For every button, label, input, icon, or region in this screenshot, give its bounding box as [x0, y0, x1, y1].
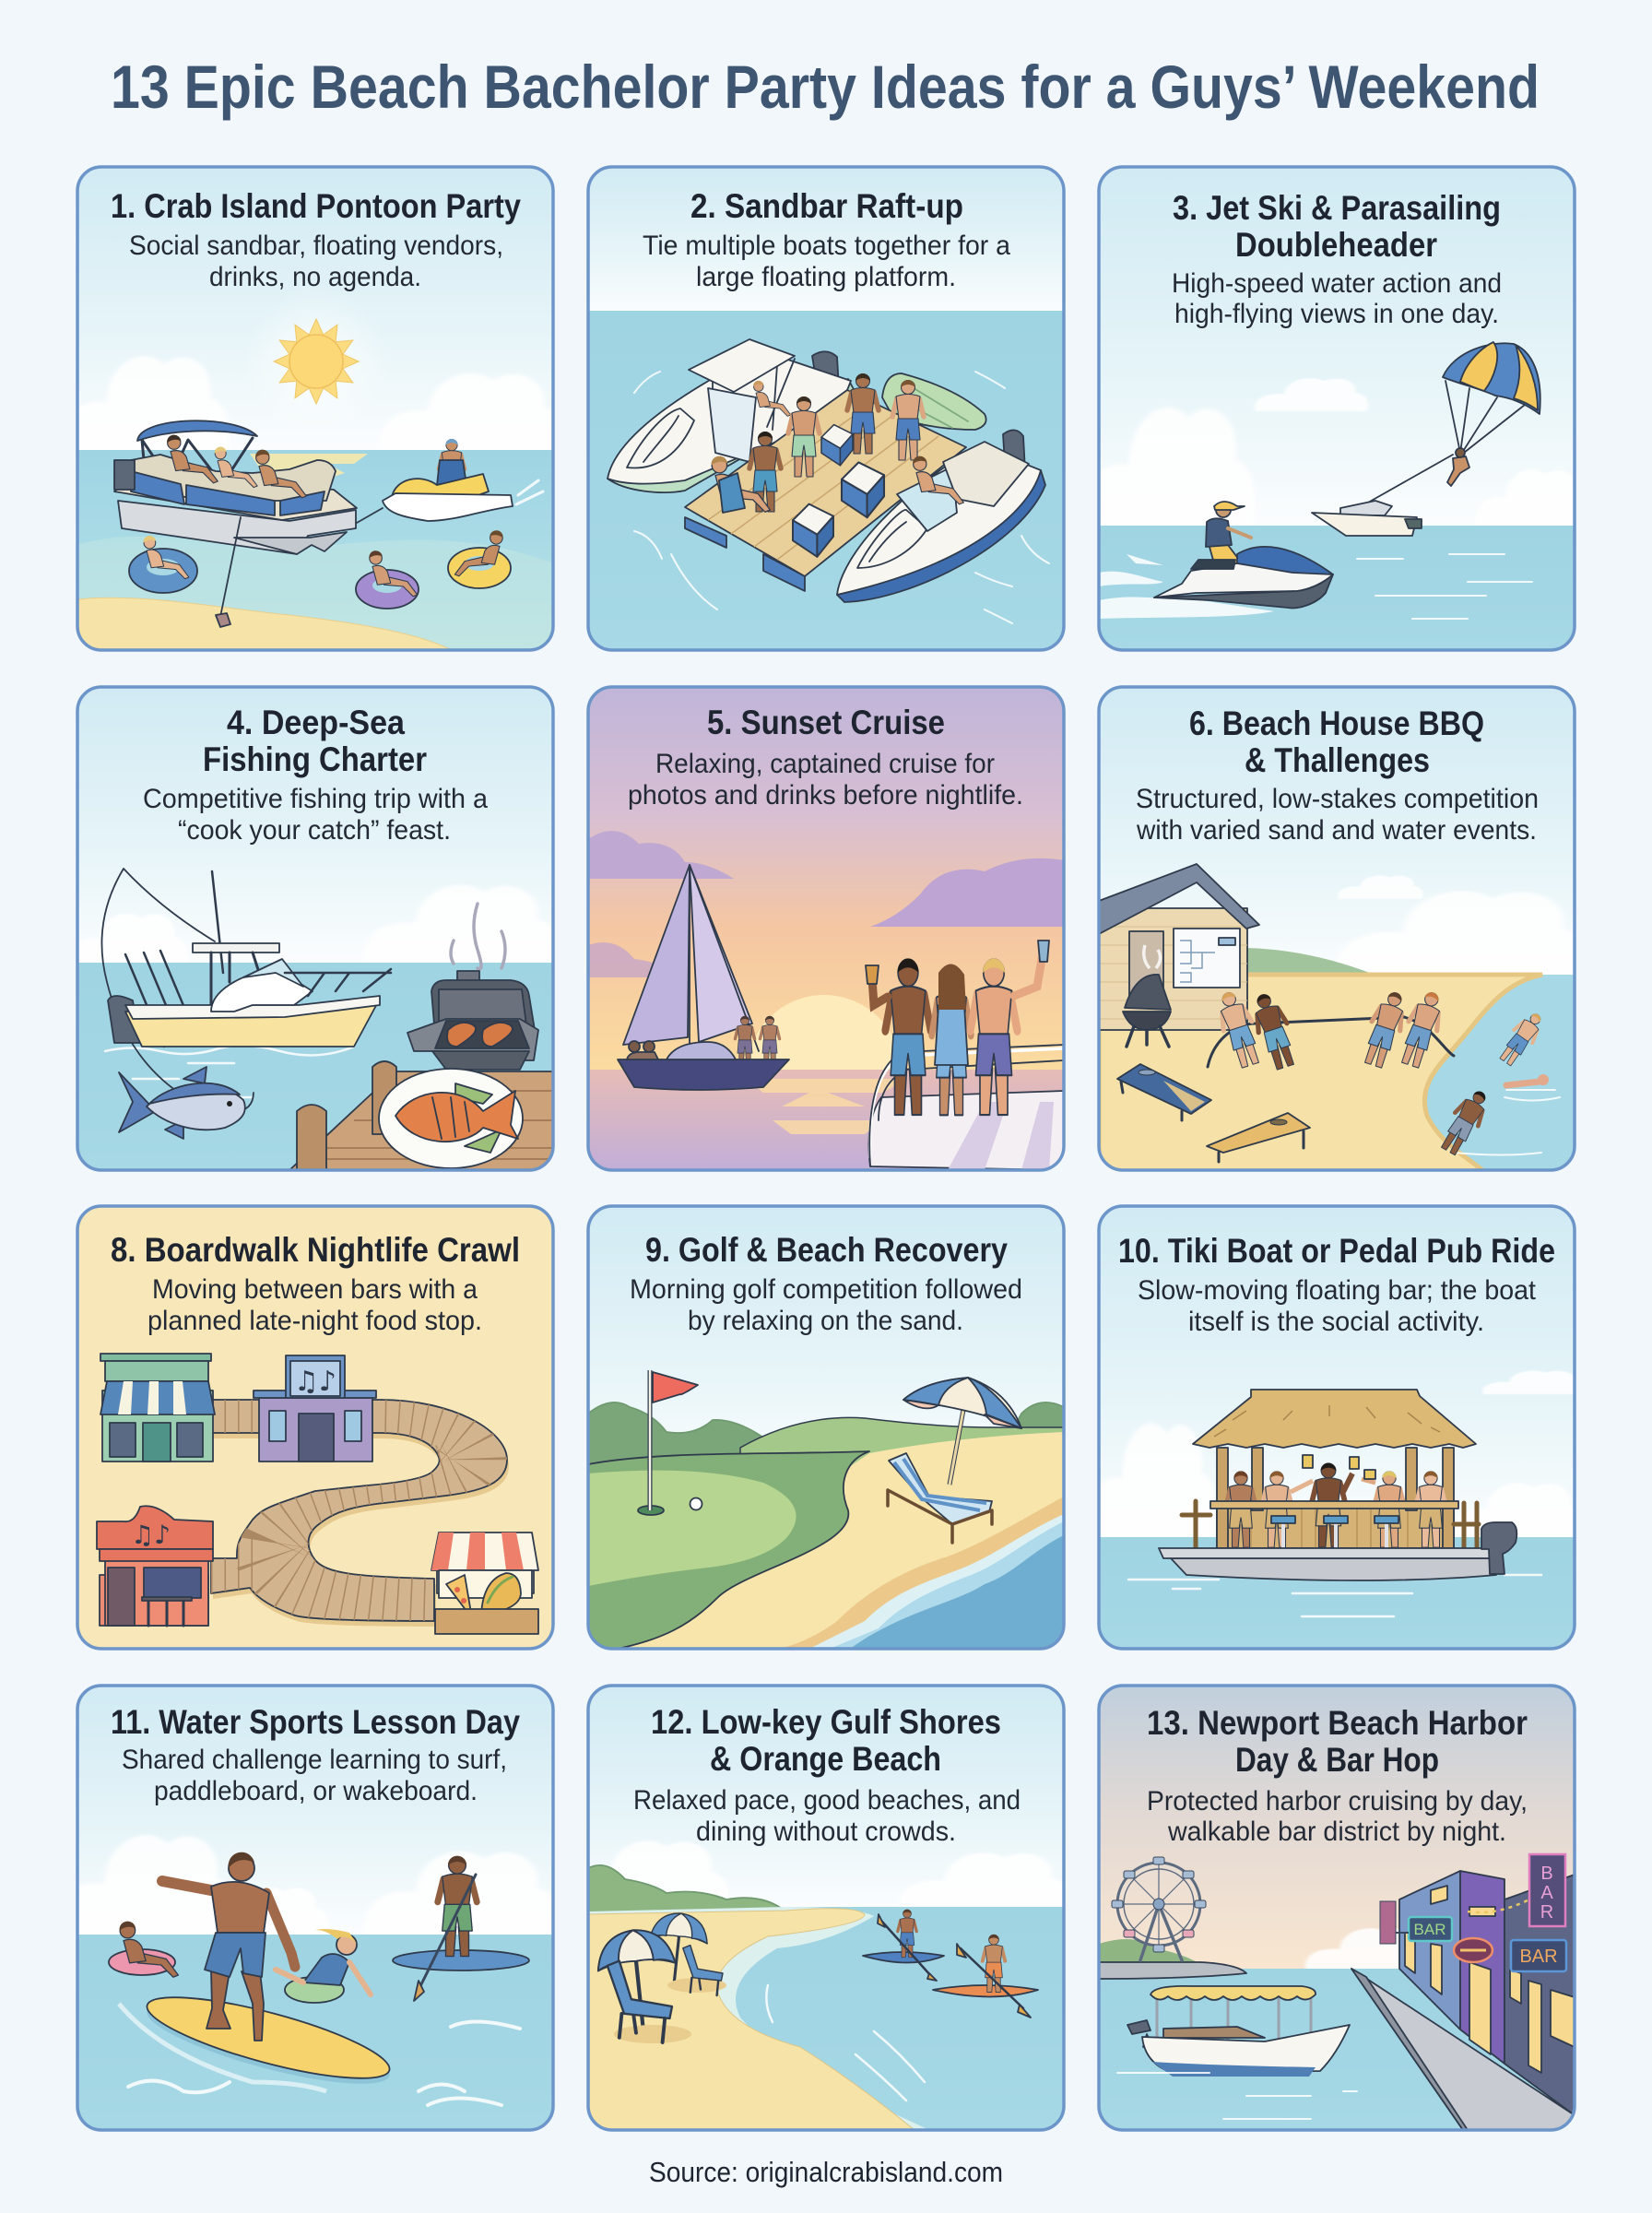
icon: surfer instructor [162, 1852, 295, 2041]
icon: pontoon hull [1159, 1548, 1496, 1580]
tow line [1368, 455, 1453, 503]
icon: tiki bar with thatched roof [1182, 1448, 1479, 1549]
description: Morning golf competition followed [630, 1274, 1022, 1305]
illustration: jet ski and parasail [1085, 167, 1589, 651]
description: Moving between bars with a [152, 1274, 478, 1305]
icon: orange kayak [933, 1935, 1038, 2018]
fairway [740, 1417, 1064, 1483]
icon: duffy boat [1127, 1986, 1350, 2077]
description: itself is the social activity. [1188, 1307, 1484, 1337]
icon: ferris wheel [1112, 1857, 1206, 1960]
description: Competitive fishing trip with a [143, 784, 488, 814]
icon: left white boat [608, 339, 856, 492]
icon: neon signs: R [1540, 1902, 1553, 1923]
description: planned late-night food stop. [148, 1306, 482, 1336]
sand [77, 598, 454, 651]
icon: blue cornhole board [1117, 1064, 1211, 1120]
heading [203, 704, 427, 778]
icon: dock [289, 1061, 553, 1171]
heading [1189, 704, 1484, 779]
illustration: golf green and beach [588, 1206, 1064, 1649]
icon: red bar with stools: ♫♪ [131, 1520, 171, 1550]
description [143, 784, 488, 846]
description: Shared challenge learning to surf, [122, 1745, 507, 1775]
icon: golf flag [638, 1370, 698, 1515]
panel: 12. Low-key Gulf Shores & Orange Beach [569, 1686, 1070, 2130]
icon: golf ball [690, 1497, 702, 1510]
icon: headland [1099, 1939, 1200, 1964]
icon: coolers [793, 425, 884, 557]
icon: kettle grill [1123, 945, 1171, 1047]
description: dining without crowds. [696, 1817, 956, 1847]
description [1138, 1275, 1537, 1337]
sand [1099, 975, 1542, 1171]
illustration: raft-up of boats [588, 167, 1064, 650]
icon: surfboard [119, 1982, 395, 2100]
panel: 13. Newport Beach Harbor Day & Bar Hop [1099, 1686, 1575, 2130]
panel: 8. Boardwalk Nightlife Crawl [77, 1206, 553, 1649]
description [633, 1785, 1021, 1847]
icon: yellow tube person [448, 530, 511, 588]
icon: tan cornhole board [1207, 1113, 1310, 1162]
water [773, 1497, 1064, 1649]
heading: 1. Crab Island Pontoon Party [111, 187, 521, 225]
description [129, 231, 503, 292]
icon: paddleboarder [393, 1856, 529, 2001]
tug of war rope [1208, 1017, 1454, 1067]
heading: 4. Deep-Sea [227, 704, 405, 741]
icon: yacht bow [868, 1045, 1064, 1170]
icon: sun [274, 319, 359, 404]
illustration: fishing boat, grill and dock [69, 687, 560, 1171]
icon: fishing boat [101, 869, 391, 1111]
icon: pink tube person [109, 1922, 178, 1977]
description: high-flying views in one day. [1174, 299, 1499, 329]
panel: 1. Crab Island Pontoon Party [64, 167, 565, 651]
panel: 6. Beach House BBQ & Thallenges [1099, 687, 1592, 1171]
people on yacht [866, 941, 1049, 1115]
heading: & Orange Beach [710, 1740, 941, 1778]
treeline [588, 1402, 777, 1483]
icon: food stand [431, 1533, 538, 1634]
description [1172, 268, 1502, 329]
green headland [588, 1865, 785, 1927]
illustration: pontoon party at sandbar [64, 167, 565, 651]
description: Protected harbor cruising by day, [1147, 1786, 1528, 1817]
icon: parasail [1443, 342, 1540, 486]
bar counter [1210, 1501, 1458, 1509]
description: Relaxed pace, good beaches, and [633, 1785, 1021, 1816]
description: paddleboard, or wakeboard. [154, 1776, 478, 1806]
icon: green bar [100, 1354, 215, 1462]
icon: neon signs: BAR [1414, 1921, 1446, 1938]
icon: tow boat [1312, 501, 1422, 536]
description: Tie multiple boats together for a [643, 231, 1010, 261]
icon: green inflatable float [882, 373, 986, 430]
description: large floating platform. [696, 262, 956, 292]
thatched roof [1193, 1390, 1476, 1448]
illustration: tiki boat bar [1089, 1206, 1587, 1649]
people on deck [712, 373, 924, 513]
panel: 11. Water Sports Lesson Day [58, 1686, 560, 2130]
icon: purple tube person [356, 550, 419, 609]
icon: spray [1099, 554, 1274, 619]
heading: 8. Boardwalk Nightlife Crawl [111, 1231, 520, 1269]
panel: 4. Deep-Sea Fishing Charter [69, 687, 560, 1171]
icon: beach house [1099, 864, 1259, 1030]
heading [1173, 189, 1501, 264]
sand beach [588, 1907, 929, 2130]
heading [651, 1703, 1001, 1778]
description [643, 231, 1010, 292]
icon: bar stools [1271, 1516, 1398, 1548]
heading: 2. Sandbar Raft-up [690, 187, 963, 225]
description: walkable bar district by night. [1167, 1817, 1506, 1847]
description: High-speed water action and [1172, 268, 1502, 299]
icon: purple bar with music sign: ♫♪ [294, 1366, 336, 1398]
description [1136, 784, 1539, 846]
description: Social sandbar, floating vendors, [129, 231, 503, 261]
icon: neon signs [1380, 1854, 1566, 1971]
icon: right blue boat [837, 430, 1045, 602]
icon: neon signs: BAR [1519, 1947, 1558, 1967]
description [628, 749, 1023, 811]
heading: 6. Beach House BBQ [1189, 704, 1484, 742]
icon: green tube swimmer [276, 1929, 371, 2003]
boardwalk path [211, 1400, 509, 1627]
icon: harbor walkway [1351, 1969, 1575, 2130]
icon: lounge chair [888, 1453, 992, 1543]
heading: & Thallenges [1245, 741, 1430, 779]
heading: 10. Tiki Boat or Pedal Pub Ride [1118, 1232, 1555, 1270]
icon: grill [407, 971, 538, 1070]
icon: beach umbrellas [595, 1911, 710, 2034]
heading [1147, 1704, 1528, 1779]
description [148, 1274, 482, 1336]
heading: Day & Bar Hop [1235, 1741, 1439, 1779]
heading: 5. Sunset Cruise [707, 704, 945, 741]
heading: 11. Water Sports Lesson Day [111, 1703, 520, 1741]
icon: pontoon boat [114, 420, 383, 554]
heading: Doubleheader [1235, 226, 1437, 264]
illustration: quiet beach and kayaks [569, 1686, 1070, 2130]
panel: 3. Jet Ski & Parasailing Doubleheader [1085, 167, 1589, 651]
icon: jet ski with rider [1154, 502, 1333, 608]
smoke [451, 904, 505, 969]
description: Slow-moving floating bar; the boat [1138, 1275, 1537, 1306]
description: by relaxing on the sand. [688, 1306, 963, 1336]
source footer: Source: originalcrabisland.com [649, 2156, 1003, 2188]
panel: 10. Tiki Boat or Pedal Pub Ride [1089, 1206, 1587, 1649]
description: with varied sand and water events. [1136, 815, 1537, 846]
description: drinks, no agenda. [209, 262, 421, 292]
illustration: harbor cruise and bar district [1099, 1686, 1575, 2130]
icon: beach chairs [608, 1946, 726, 2043]
illustration: sailboat and yacht at sunset [588, 687, 1064, 1171]
icon: outboard motor [1481, 1522, 1516, 1574]
description: Structured, low-stakes competition [1136, 784, 1539, 814]
icon: neon signs: A [1540, 1883, 1553, 1903]
icon: beach umbrella [903, 1378, 1021, 1485]
panel: 9. Golf & Beach Recovery [588, 1206, 1064, 1649]
icon: tuna fish [119, 1067, 245, 1139]
description: “cook your catch” feast. [178, 815, 451, 846]
illustration: beach house, tug of war and cornhole [1099, 687, 1592, 1171]
icon: blue kayak [863, 1910, 944, 1981]
description: photos and drinks before nightlife. [628, 780, 1023, 811]
icon: sailboat [618, 865, 789, 1090]
icon: purple bar with music sign [254, 1355, 376, 1462]
icon: jet ski with rider [383, 439, 543, 521]
description: Relaxing, captained cruise for [655, 749, 995, 779]
icon: fish plate [379, 1069, 523, 1168]
icon: neon signs: B [1540, 1864, 1553, 1884]
people at tiki bar [1226, 1455, 1446, 1547]
swimmers and runners [1436, 1008, 1555, 1158]
heading: 9. Golf & Beach Recovery [645, 1231, 1008, 1269]
description [1147, 1786, 1528, 1847]
heading: 13. Newport Beach Harbor [1147, 1704, 1528, 1742]
description [122, 1745, 507, 1806]
icon: tug of war players [1213, 988, 1447, 1071]
panel: 5. Sunset Cruise [588, 687, 1064, 1171]
illustration: surf, paddleboard and tube lesson [58, 1686, 560, 2130]
illustration: boardwalk map with bars [77, 1206, 553, 1649]
icon: bar buildings [1399, 1871, 1575, 2115]
icon: red bar with stools [97, 1506, 213, 1626]
heading: Fishing Charter [203, 740, 427, 778]
icon: wooden deck platform [685, 390, 966, 591]
panel: 2. Sandbar Raft-up [588, 167, 1064, 650]
heading: 3. Jet Ski & Parasailing [1173, 189, 1501, 227]
anchor line [220, 517, 241, 617]
description [630, 1274, 1022, 1336]
icon: blue tube person [129, 536, 197, 593]
heading: 12. Low-key Gulf Shores [651, 1703, 1001, 1741]
